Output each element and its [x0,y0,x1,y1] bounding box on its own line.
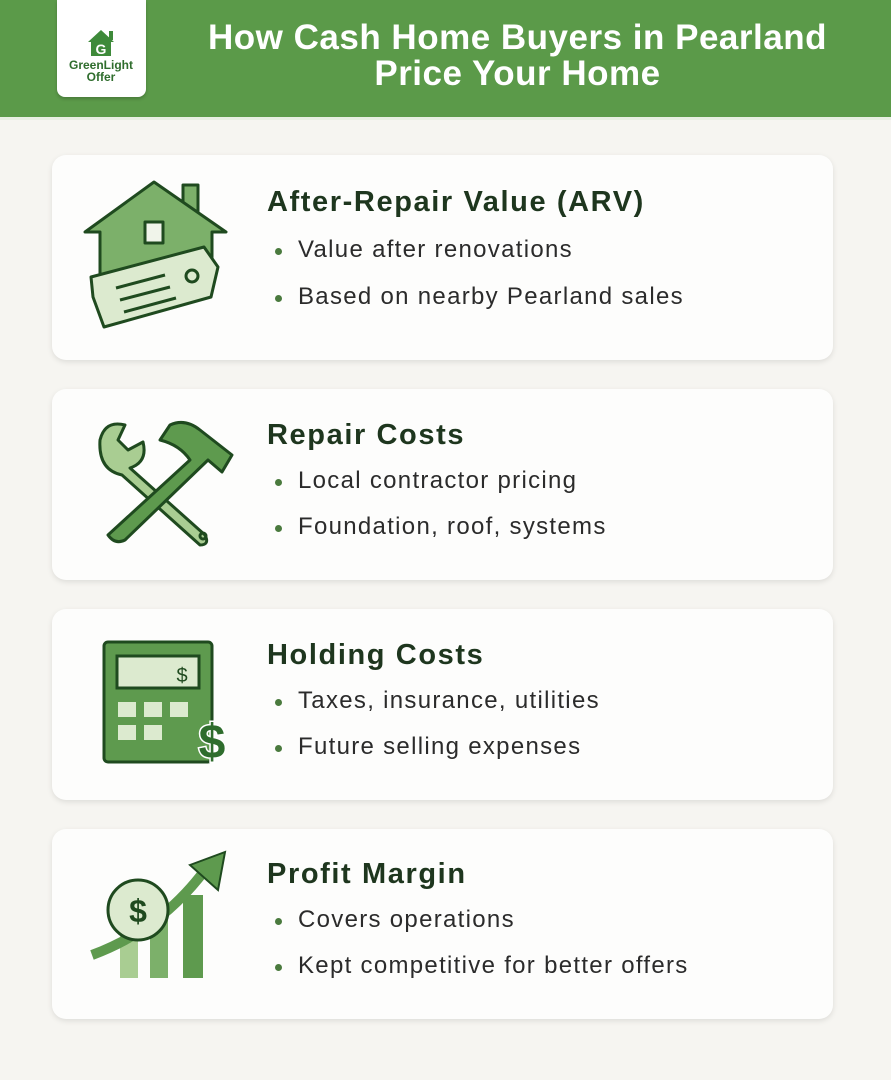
icon: calculator with dollar: $ [176,665,188,687]
heading: After-Repair Value (ARV) [267,186,645,218]
title [208,18,827,93]
panel: profit margin: Kept competitive for better offers [298,952,689,979]
panel: holding costs [52,609,833,800]
logo: GreenLight [69,58,133,72]
panel: holding costs: Future selling expenses [298,733,581,760]
bullets: Local contractor pricing [298,467,577,494]
logo [57,0,146,97]
title: How Cash Home Buyers in Pearland [208,18,827,57]
heading: Profit Margin [267,858,467,890]
icon: coin and growth arrow [90,850,226,978]
icon: calculator with dollar [102,640,226,769]
logo: G [96,41,107,57]
panel: repair costs: Foundation, roof, systems [298,513,607,540]
panel: profit margin [52,829,833,1019]
panel: repair costs [52,389,833,580]
panel: ARV [52,155,833,360]
heading: Holding Costs [267,639,484,671]
header banner [0,0,891,120]
icon: coin and growth arrow: $ [129,893,147,929]
panel: ARV: Based on nearby Pearland sales [298,283,684,310]
bullets: Value after renovations [298,236,573,263]
title: Price Your Home [374,54,661,93]
icon: calculator with dollar: $ [199,716,226,769]
icon: house with tag [84,180,228,328]
bullets: Taxes, insurance, utilities [298,687,600,714]
heading: Repair Costs [267,419,465,451]
icon: wrench and hammer [98,420,234,546]
logo: Offer [87,70,116,84]
bullets: Covers operations [298,906,515,933]
